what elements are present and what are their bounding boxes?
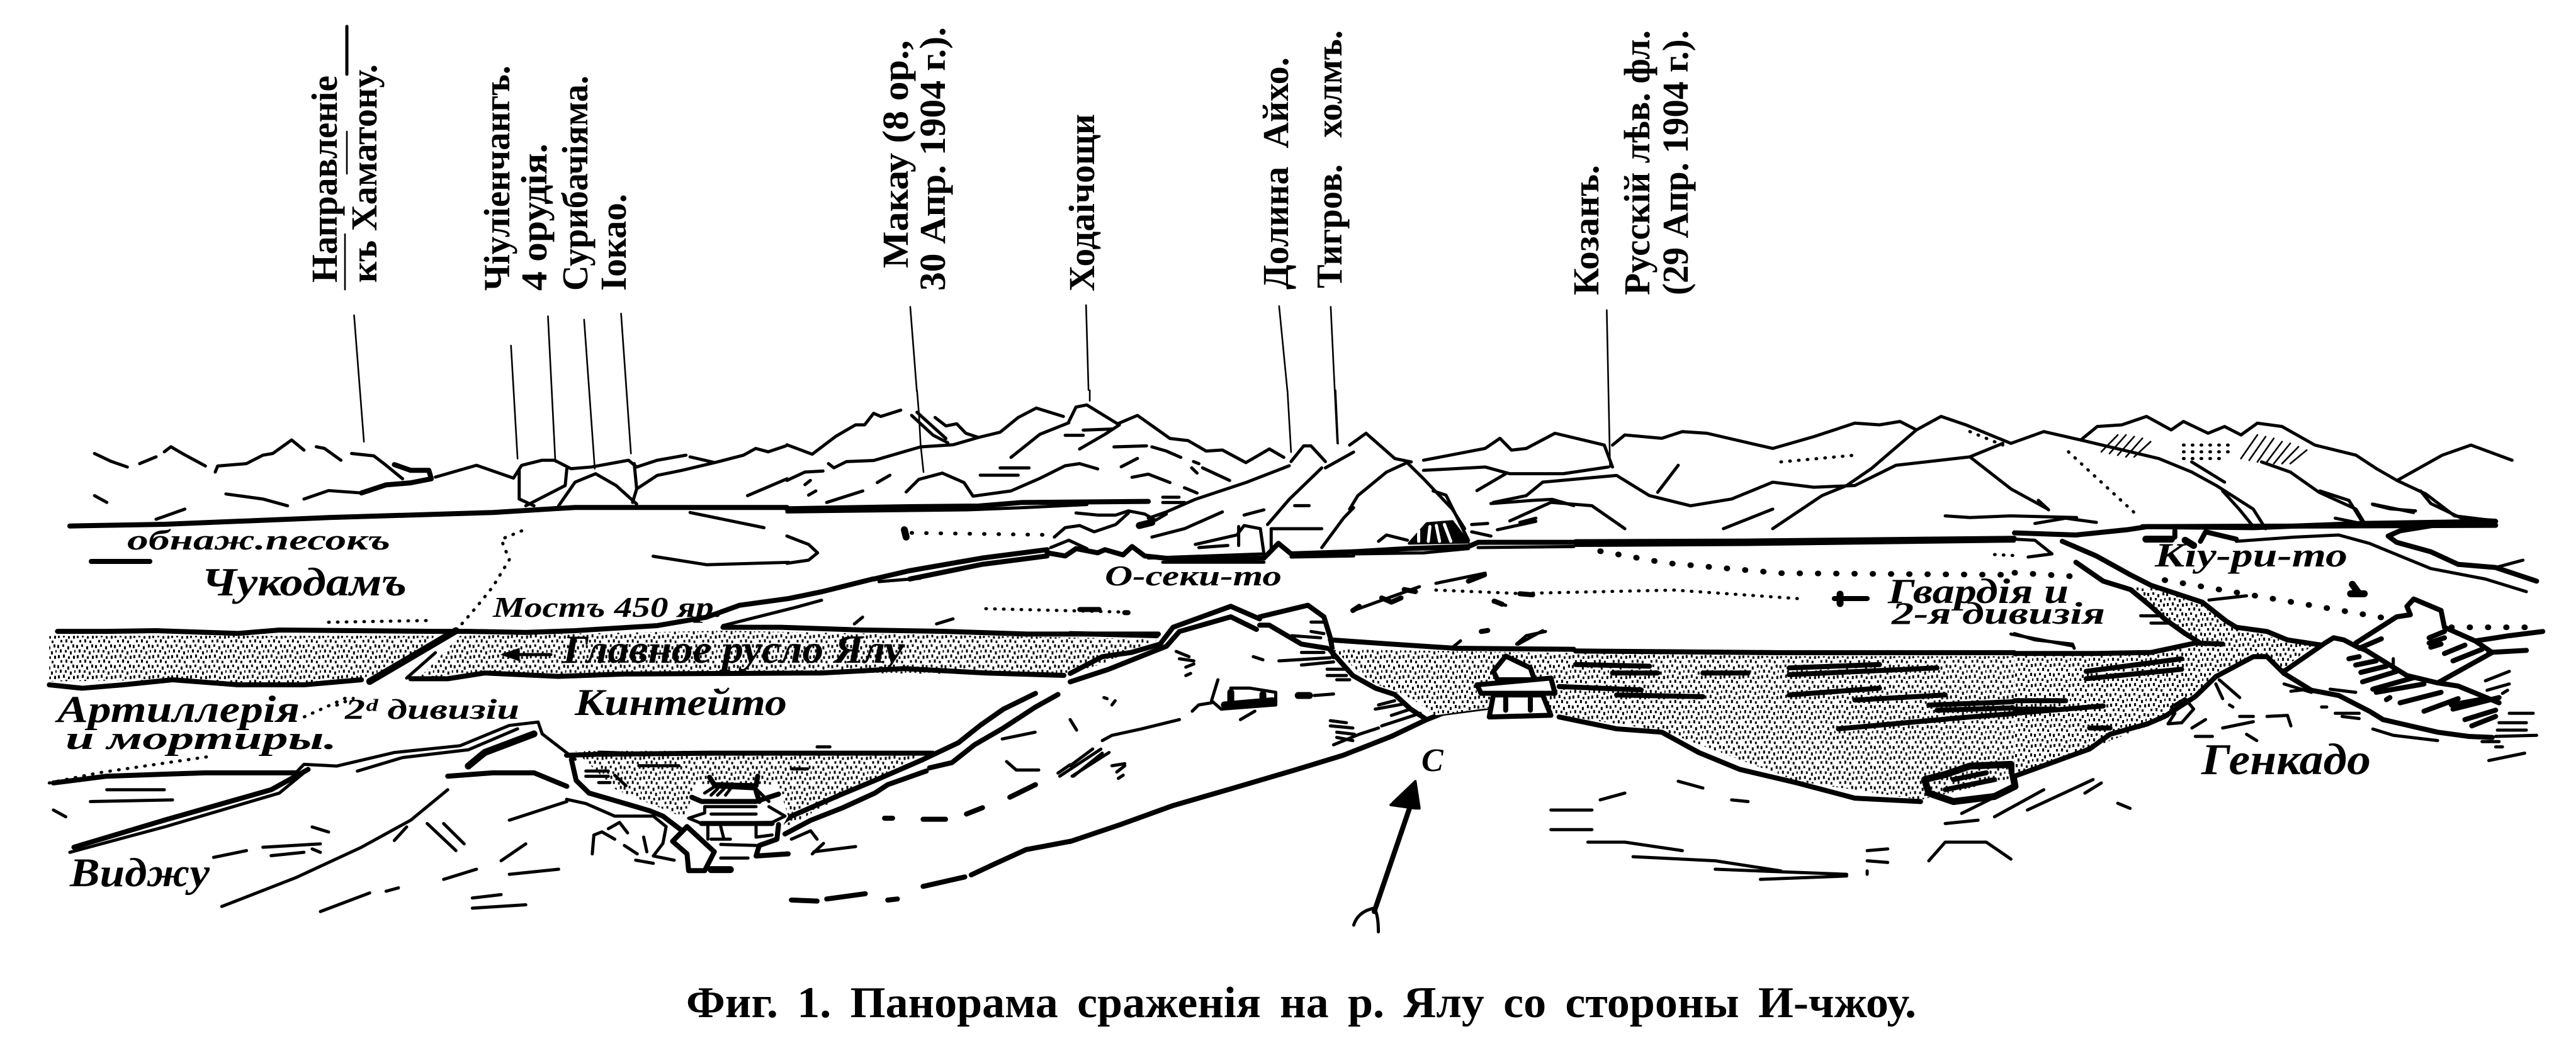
vertical label: direction to Khamatan: Направленіе: [304, 76, 345, 283]
map label: mortars: и мортиры.: [65, 721, 337, 757]
map label: Genkado: Генкадо: [2201, 736, 2371, 784]
river stipple: main channel west: [49, 636, 436, 685]
vertical label: Suribachiyama: Сурибачіяма.: [555, 76, 596, 291]
near river bank and west pagoda: [567, 694, 1070, 901]
icon: pagoda east: [1477, 656, 1555, 717]
vertical label: Khodaichoshchi: Ходаічощи: [1061, 114, 1102, 291]
map label: O-seki-to: О-секи-то: [1105, 560, 1282, 592]
Yalu valley: west part: [49, 531, 1158, 911]
hatched rock: [1409, 521, 1469, 543]
map label: exposed sand: обнаж.песокъ: [127, 524, 390, 556]
river stipple: near channel: [575, 751, 929, 830]
river dashes: [1559, 665, 2014, 729]
central hill, O-seki-to bank and wall: [1070, 491, 1574, 806]
Yalu valley: east part: [1333, 538, 2217, 932]
vertical label: Chiulienchang: Чіуліенчангъ.: [477, 65, 517, 291]
map label: Widju: Виджу: [69, 850, 210, 896]
map label: Kiu-ri-to: Кіу-ри-то: [2154, 536, 2347, 574]
icon: pagoda west: [686, 776, 788, 858]
map label: artillery: Артиллерія: [54, 689, 300, 730]
river stipple: main channel: [419, 631, 1158, 678]
vertical label: direction to Khamatan: къ Хаматону.: [344, 64, 385, 283]
map label: bridge: Мостъ 450 яр.: [492, 591, 723, 623]
vertical label: Iokao: Іокао.: [593, 194, 634, 291]
river stipple: east end: [2014, 587, 2312, 774]
map label: Chukodam: Чукодамъ: [201, 560, 407, 604]
map label: 2nd division east: 2-я дивизія: [1891, 595, 2105, 631]
shrubs: [592, 823, 856, 864]
map label: main channel: Главное русло Ялу: [562, 627, 904, 672]
vertical label: 4 guns: 4 орудія.: [514, 144, 555, 291]
central-west mountains around Makau and Khodaichoshchi: [787, 390, 1353, 579]
vertical label: 30 April 1904: 30 Апр. 1904 г.).: [912, 27, 953, 291]
vertical label: Aikho valley: Долина Айхо.: [1255, 57, 1296, 290]
map label: Guards: Гвардія и: [1887, 572, 2069, 611]
eastern mountains: [1331, 307, 2512, 529]
village: [1211, 680, 1333, 709]
sand marker stroke: [91, 559, 150, 564]
leader lines and far western mountains: [70, 305, 1287, 527]
hill lower edge connector: [1070, 806, 1173, 842]
north arrow: [1353, 781, 1420, 932]
map label: Kinteito: Кинтейто: [574, 682, 787, 723]
map label: 2nd division: 2ᵈ дивизіи: [344, 693, 519, 725]
vertical label: 29 April 1904: (29 Апр. 1904 г.).: [1655, 30, 1696, 295]
river stipple: lower Yalu: [1333, 646, 2217, 800]
lower hillside marks: [1551, 781, 2011, 879]
vertical label: direction to Khamatan: [304, 26, 385, 290]
map label: north letter: С: [1421, 743, 1444, 779]
vertical label: Makau: Макау (8 ор.,: [875, 40, 916, 268]
lower tower: [672, 826, 730, 870]
caption: Фиг. 1. Панорама сраженія на р. Ялу со стороны И-чжоу.: [686, 979, 1916, 1027]
vertical label: Russian left flank: Русскій лѣв. фл.: [1617, 30, 1658, 295]
vertical label: Tiger hill: Тигров. холмъ.: [1309, 30, 1350, 288]
icon: shrubs: [1924, 764, 2130, 823]
vertical label: Kozan: Козанъ.: [1566, 165, 1607, 295]
north-eastern shore, tributary and Genkado hills: [2014, 491, 2543, 776]
hillside dashes and lower edge: [791, 785, 1070, 901]
